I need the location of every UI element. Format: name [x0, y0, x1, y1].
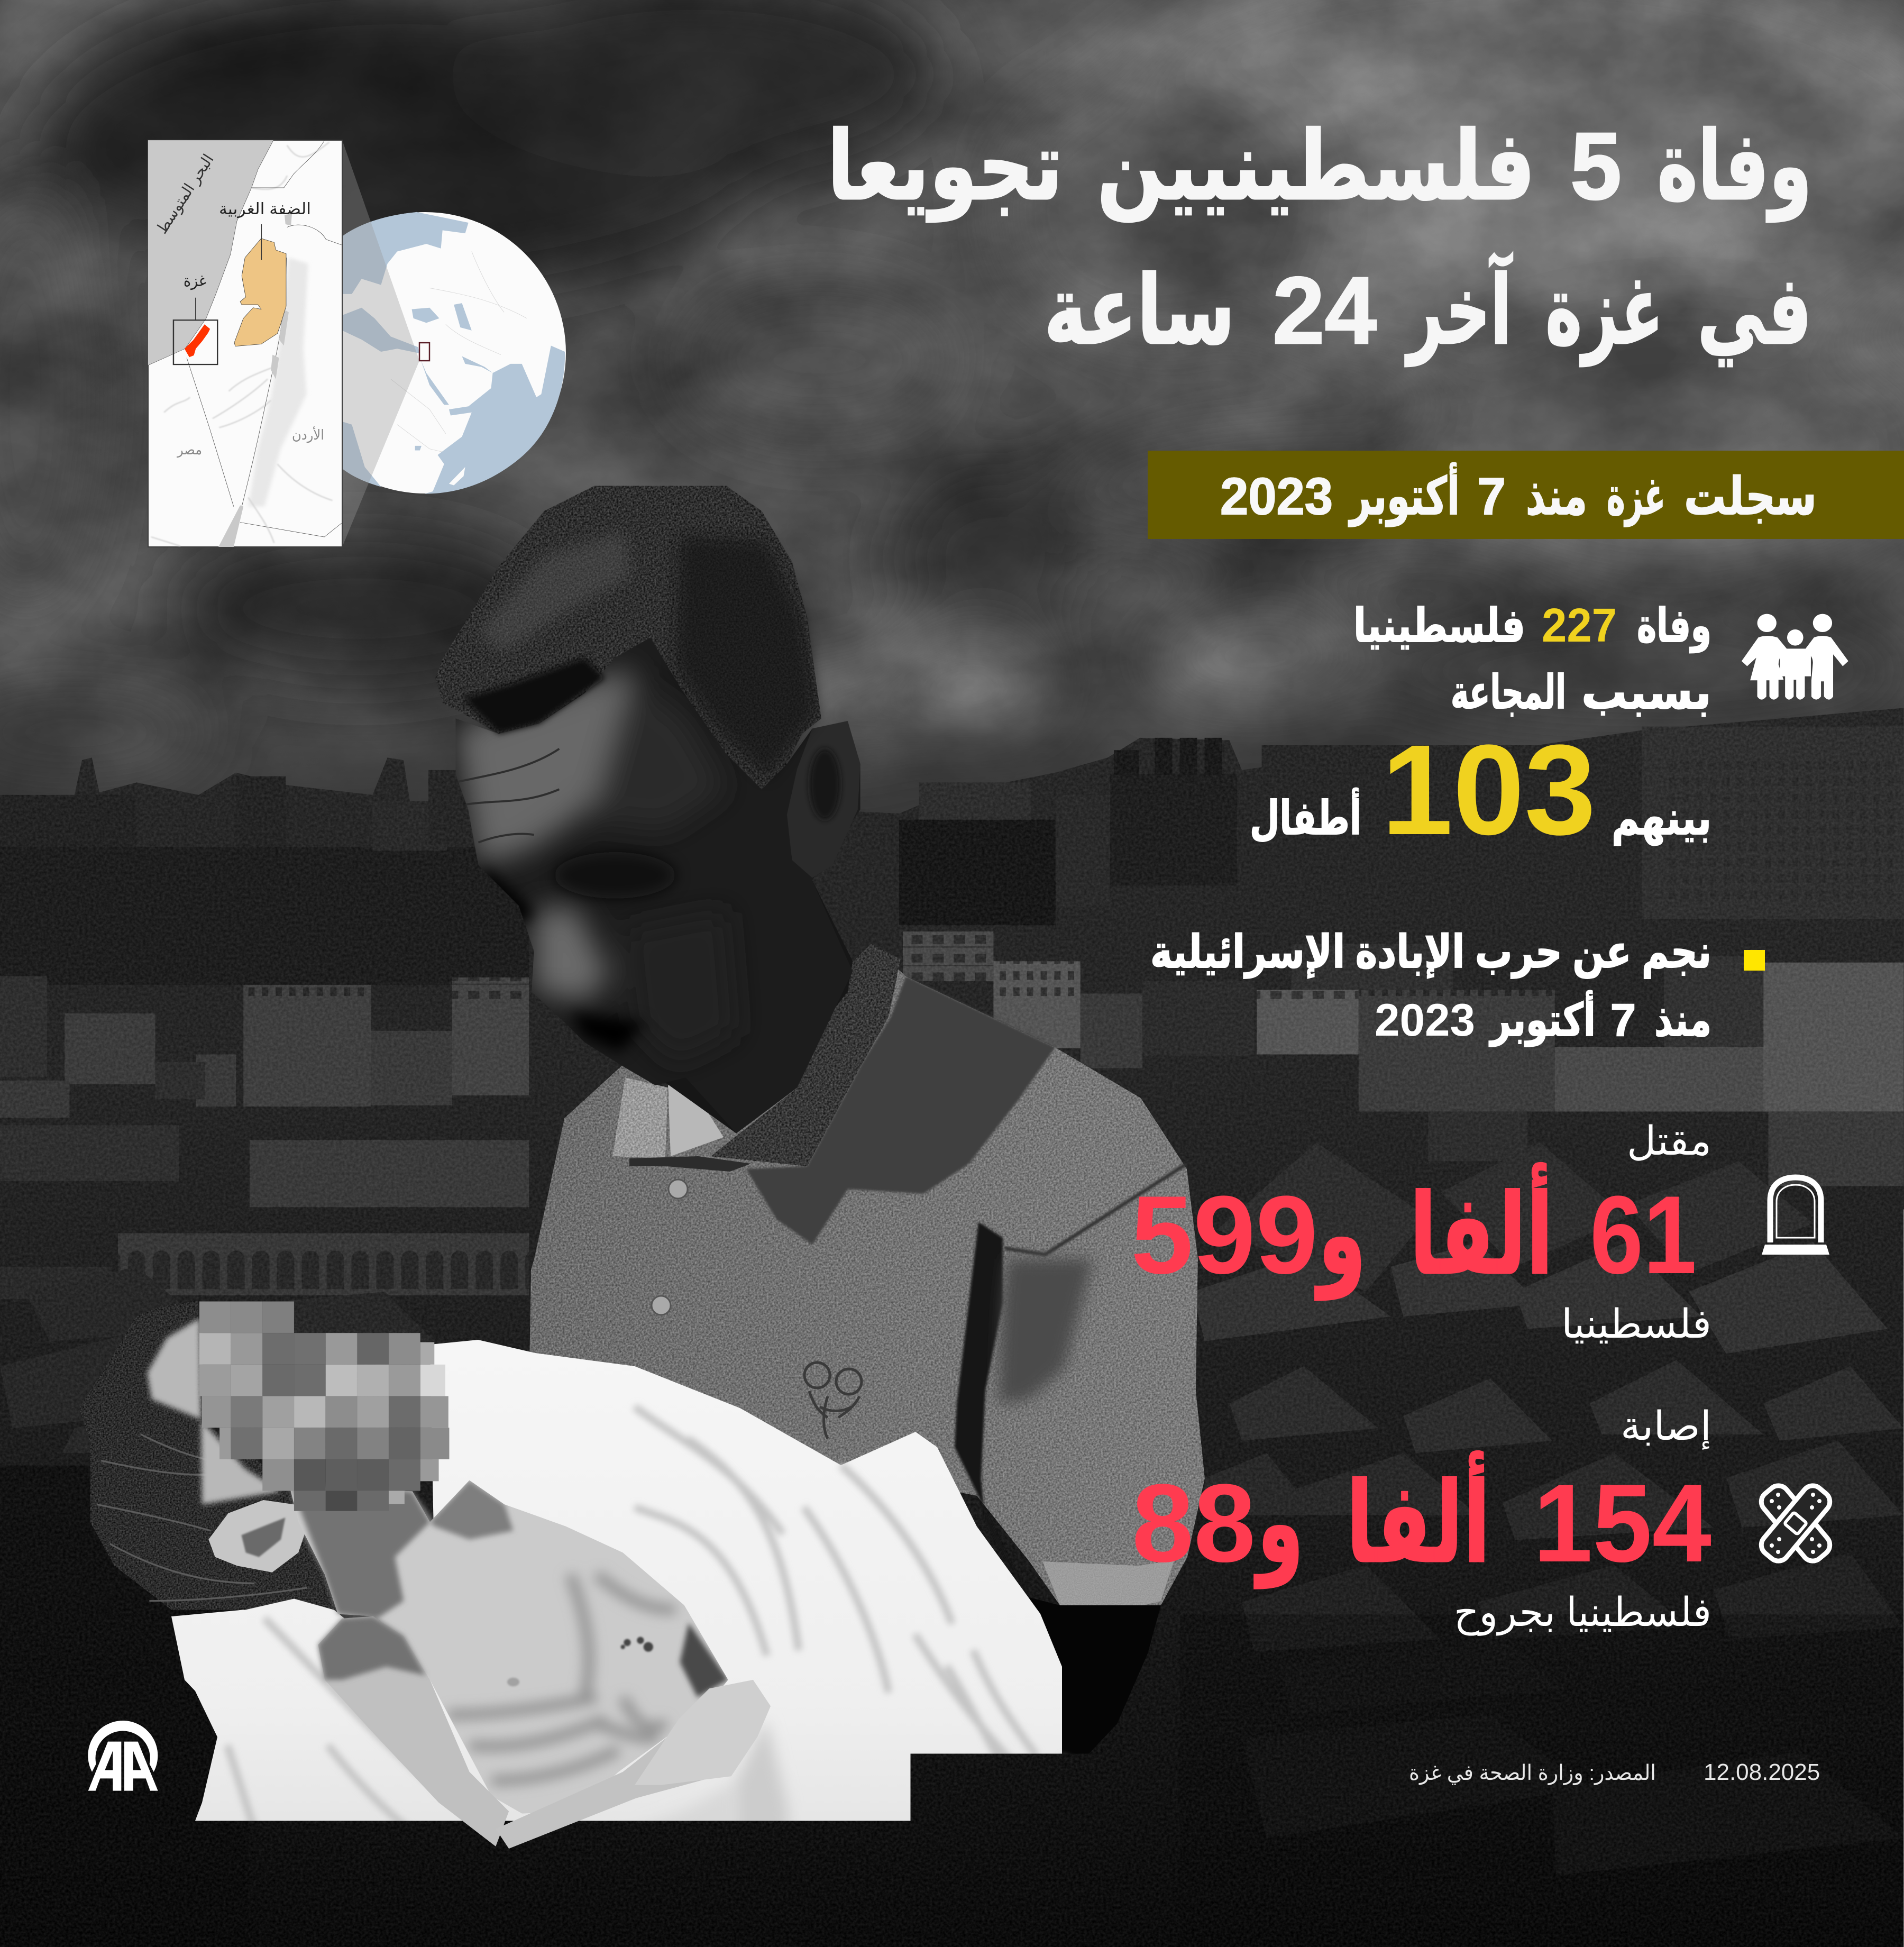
stat: deaths from hunger: المجاعة — [1451, 666, 1566, 718]
banner: 2023 — [1220, 467, 1333, 525]
sleeve seam — [1005, 1164, 1187, 1255]
gaza strip — [185, 324, 210, 357]
man: hair — [435, 486, 821, 789]
stat: injured: 154 — [1533, 1461, 1711, 1585]
banner: 7 — [1477, 467, 1506, 525]
label: Jordan: الأردن — [292, 426, 324, 443]
stat: deaths from hunger: فلسطينيا — [1353, 599, 1525, 652]
banner: سجلت — [1684, 467, 1817, 525]
destroyed city layer — [0, 708, 1903, 1947]
sleeve shadow — [999, 1259, 1093, 1404]
stat: deaths from hunger: 227 — [1542, 599, 1617, 652]
sea — [148, 140, 273, 365]
title — [827, 113, 1812, 367]
locator map: globe and inset — [148, 140, 566, 547]
title: 5 — [1570, 113, 1622, 220]
child: neck — [290, 1483, 465, 1616]
sheet: shaded lower right — [788, 1754, 1249, 1947]
stat: killed: مقتل — [1627, 1119, 1711, 1164]
stat: deaths from hunger: أطفال — [1250, 788, 1361, 844]
child: hair — [79, 1301, 338, 1610]
sheet: highlight patch — [1161, 1857, 1195, 1917]
child: hand — [635, 1680, 771, 1785]
bullet — [1744, 950, 1765, 971]
stat: injured — [1132, 1404, 1711, 1636]
child: body — [272, 1469, 771, 1849]
title: ساعة — [1044, 258, 1235, 364]
stat: killed — [1131, 1119, 1711, 1347]
title: آخر — [1405, 252, 1513, 367]
label: Mediterranean: البحر المتوسط — [153, 151, 217, 237]
borders — [187, 141, 342, 537]
stat: deaths from hunger — [1250, 599, 1711, 862]
date: 12.08.2025 — [1704, 1759, 1820, 1785]
child: torso — [272, 1469, 754, 1829]
banner: غزة — [1607, 467, 1665, 527]
stat: injured: ألفا — [1346, 1450, 1490, 1585]
stat: deaths from hunger: بينهم — [1612, 792, 1711, 846]
shirt emblem — [804, 1363, 862, 1439]
sheet: lower left shadow — [444, 1783, 736, 1947]
title: 24 — [1273, 258, 1377, 364]
locator cone — [342, 140, 419, 547]
leaders — [196, 224, 261, 320]
man: shirt — [529, 944, 1205, 1612]
title: تجويعا — [827, 113, 1063, 222]
man: ear — [787, 721, 861, 878]
sheet: folded band — [736, 1719, 788, 1947]
man: hair shading — [675, 536, 817, 779]
stat: injured: 88 — [1132, 1461, 1256, 1585]
stat: killed: فلسطينيا — [1561, 1302, 1711, 1347]
note: resulting from the war — [1150, 927, 1711, 1047]
dead sea, lakes — [279, 309, 289, 345]
rubble and tents — [0, 1142, 1903, 1652]
torso shadow — [955, 1222, 1029, 1601]
source: المصدر: وزارة الصحة في غزة — [1409, 1761, 1656, 1785]
stat: killed: 61 — [1590, 1173, 1697, 1297]
dark mass — [0, 727, 1903, 985]
lit buildings — [0, 931, 1903, 1299]
banner: أكتوبر — [1348, 462, 1460, 527]
white sheet — [171, 1340, 1249, 1947]
stat: injured: و — [1254, 1461, 1304, 1589]
title: وفاة — [1657, 113, 1812, 223]
child: scalp — [147, 1318, 281, 1504]
gaza box — [173, 320, 217, 364]
title: غزة — [1545, 258, 1663, 367]
stat: deaths from hunger: وفاة — [1637, 599, 1711, 653]
label: Egypt: مصر — [176, 442, 202, 458]
title: فلسطينيين — [1097, 113, 1535, 222]
child: hair and head — [79, 1301, 465, 1616]
label: West Bank: الضفة الغربية — [219, 200, 311, 218]
terrain — [151, 142, 333, 546]
sleeve cuff — [1042, 1560, 1174, 1612]
stat: deaths from hunger: بسبب — [1581, 666, 1711, 718]
note: resulting from the war: 7 — [1610, 995, 1636, 1046]
man: head — [435, 486, 898, 1148]
globe — [285, 212, 566, 494]
banner — [1148, 451, 1904, 539]
stat: killed: 599 — [1131, 1173, 1318, 1297]
logo: Anadolu Agency — [88, 1721, 158, 1791]
note: resulting from the war: منذ — [1654, 995, 1711, 1046]
stat: killed: و — [1315, 1173, 1366, 1301]
icon: bandages — [1757, 1482, 1834, 1565]
note: resulting from the war: نجم عن حرب الإبادة الإسرائيلية — [1150, 927, 1711, 979]
photo: man carrying a starved child — [79, 486, 1249, 1947]
stat: killed: ألفا — [1409, 1162, 1553, 1297]
child: forearm — [496, 1691, 742, 1849]
stat: injured: إصابة — [1621, 1404, 1711, 1450]
icon: family — [1742, 614, 1848, 700]
note: resulting from the war: 2023 — [1375, 995, 1475, 1046]
stat: deaths from hunger: 103 — [1381, 718, 1596, 862]
man: arm — [1029, 1597, 1161, 1761]
west bank — [234, 239, 286, 346]
stat: injured: فلسطينيا بجروح — [1454, 1590, 1711, 1636]
locator box on globe — [419, 343, 429, 361]
child: ear — [208, 1500, 307, 1573]
child: hair strands — [97, 1434, 307, 1601]
child: upper arm — [318, 1616, 509, 1847]
title: في — [1697, 258, 1812, 367]
label: Gaza: غزة — [184, 272, 206, 290]
man: neck — [665, 880, 853, 1134]
note: resulting from the war: أكتوبر — [1489, 990, 1596, 1047]
blurred mosaic over child's face — [199, 1301, 449, 1511]
map panel — [148, 140, 342, 547]
icon: gravestone — [1762, 1177, 1829, 1255]
banner: منذ — [1526, 467, 1587, 525]
man: face — [443, 617, 898, 1148]
